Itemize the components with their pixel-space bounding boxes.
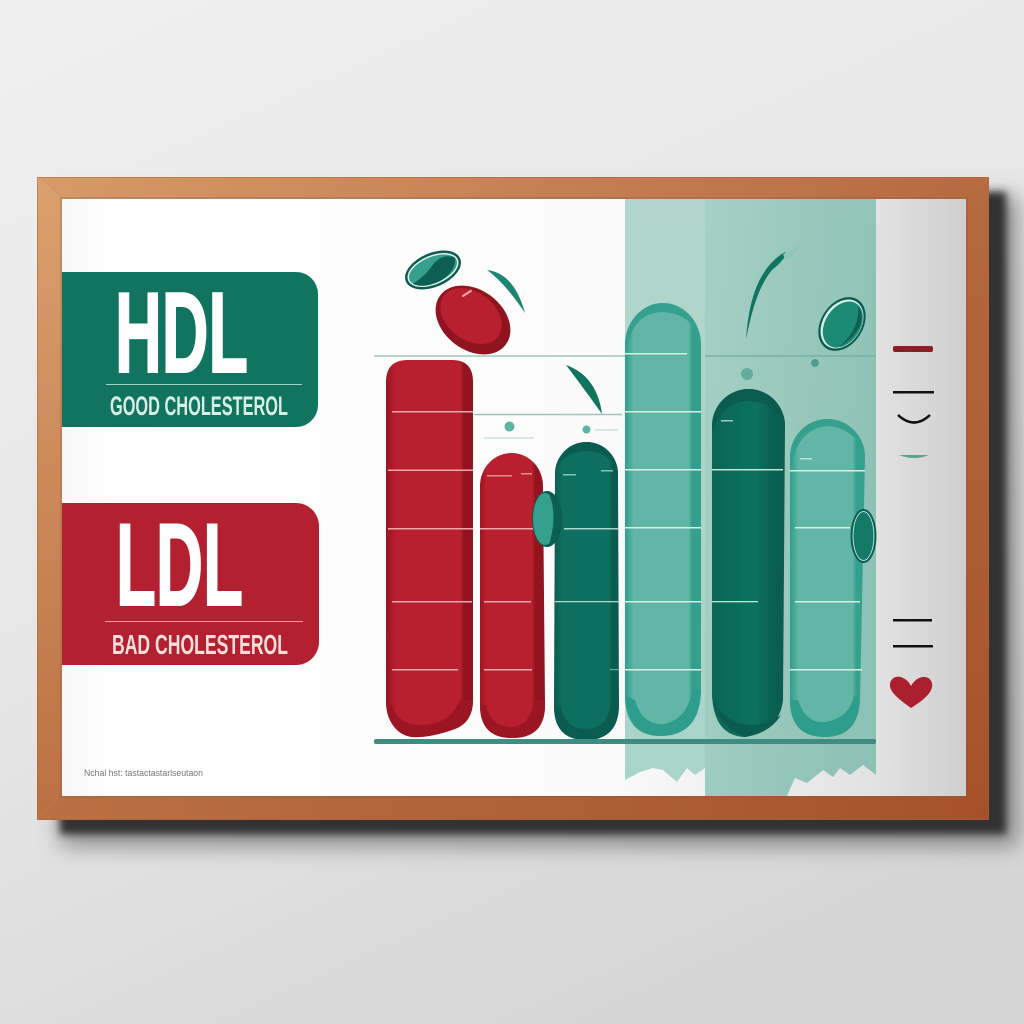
LDL heading: LDL [116, 499, 243, 630]
bar: deep green [712, 389, 785, 737]
HDL label panel [62, 270, 318, 427]
icon: heart [890, 677, 932, 708]
icon: leaf right [746, 245, 800, 340]
icon: leaf middle [566, 365, 602, 414]
icon: red capsule top [422, 271, 524, 369]
HDL heading: HDL [115, 270, 248, 397]
LDL caption: BAD CHOLESTEROL [112, 629, 288, 660]
icon: capsule on bars right [850, 509, 876, 563]
teal background columns [625, 199, 876, 796]
bar chart [386, 303, 865, 740]
icon: teal capsule top [399, 243, 467, 297]
legend marks [893, 346, 934, 648]
small footnote: Nchal hst: tastactastarlseutaon [84, 768, 203, 778]
bar: dark green [554, 442, 619, 740]
bar: teal short [790, 419, 865, 737]
frame shadow [60, 192, 1018, 846]
chart guide lines [374, 356, 876, 438]
chart baseline [374, 739, 876, 744]
icon: capsule on bars left [532, 491, 562, 547]
LDL label panel [62, 499, 319, 665]
icon: leaf top left [487, 270, 525, 313]
HDL caption: GOOD CHOLESTEROL [110, 391, 288, 421]
wooden frame [37, 177, 989, 820]
decorative dots [504, 359, 819, 434]
poster sheet [62, 199, 966, 796]
bar: red tall [386, 360, 473, 737]
bar: teal tall [625, 303, 701, 736]
bar: red short [480, 453, 545, 738]
icon: teal capsule right [809, 288, 875, 360]
